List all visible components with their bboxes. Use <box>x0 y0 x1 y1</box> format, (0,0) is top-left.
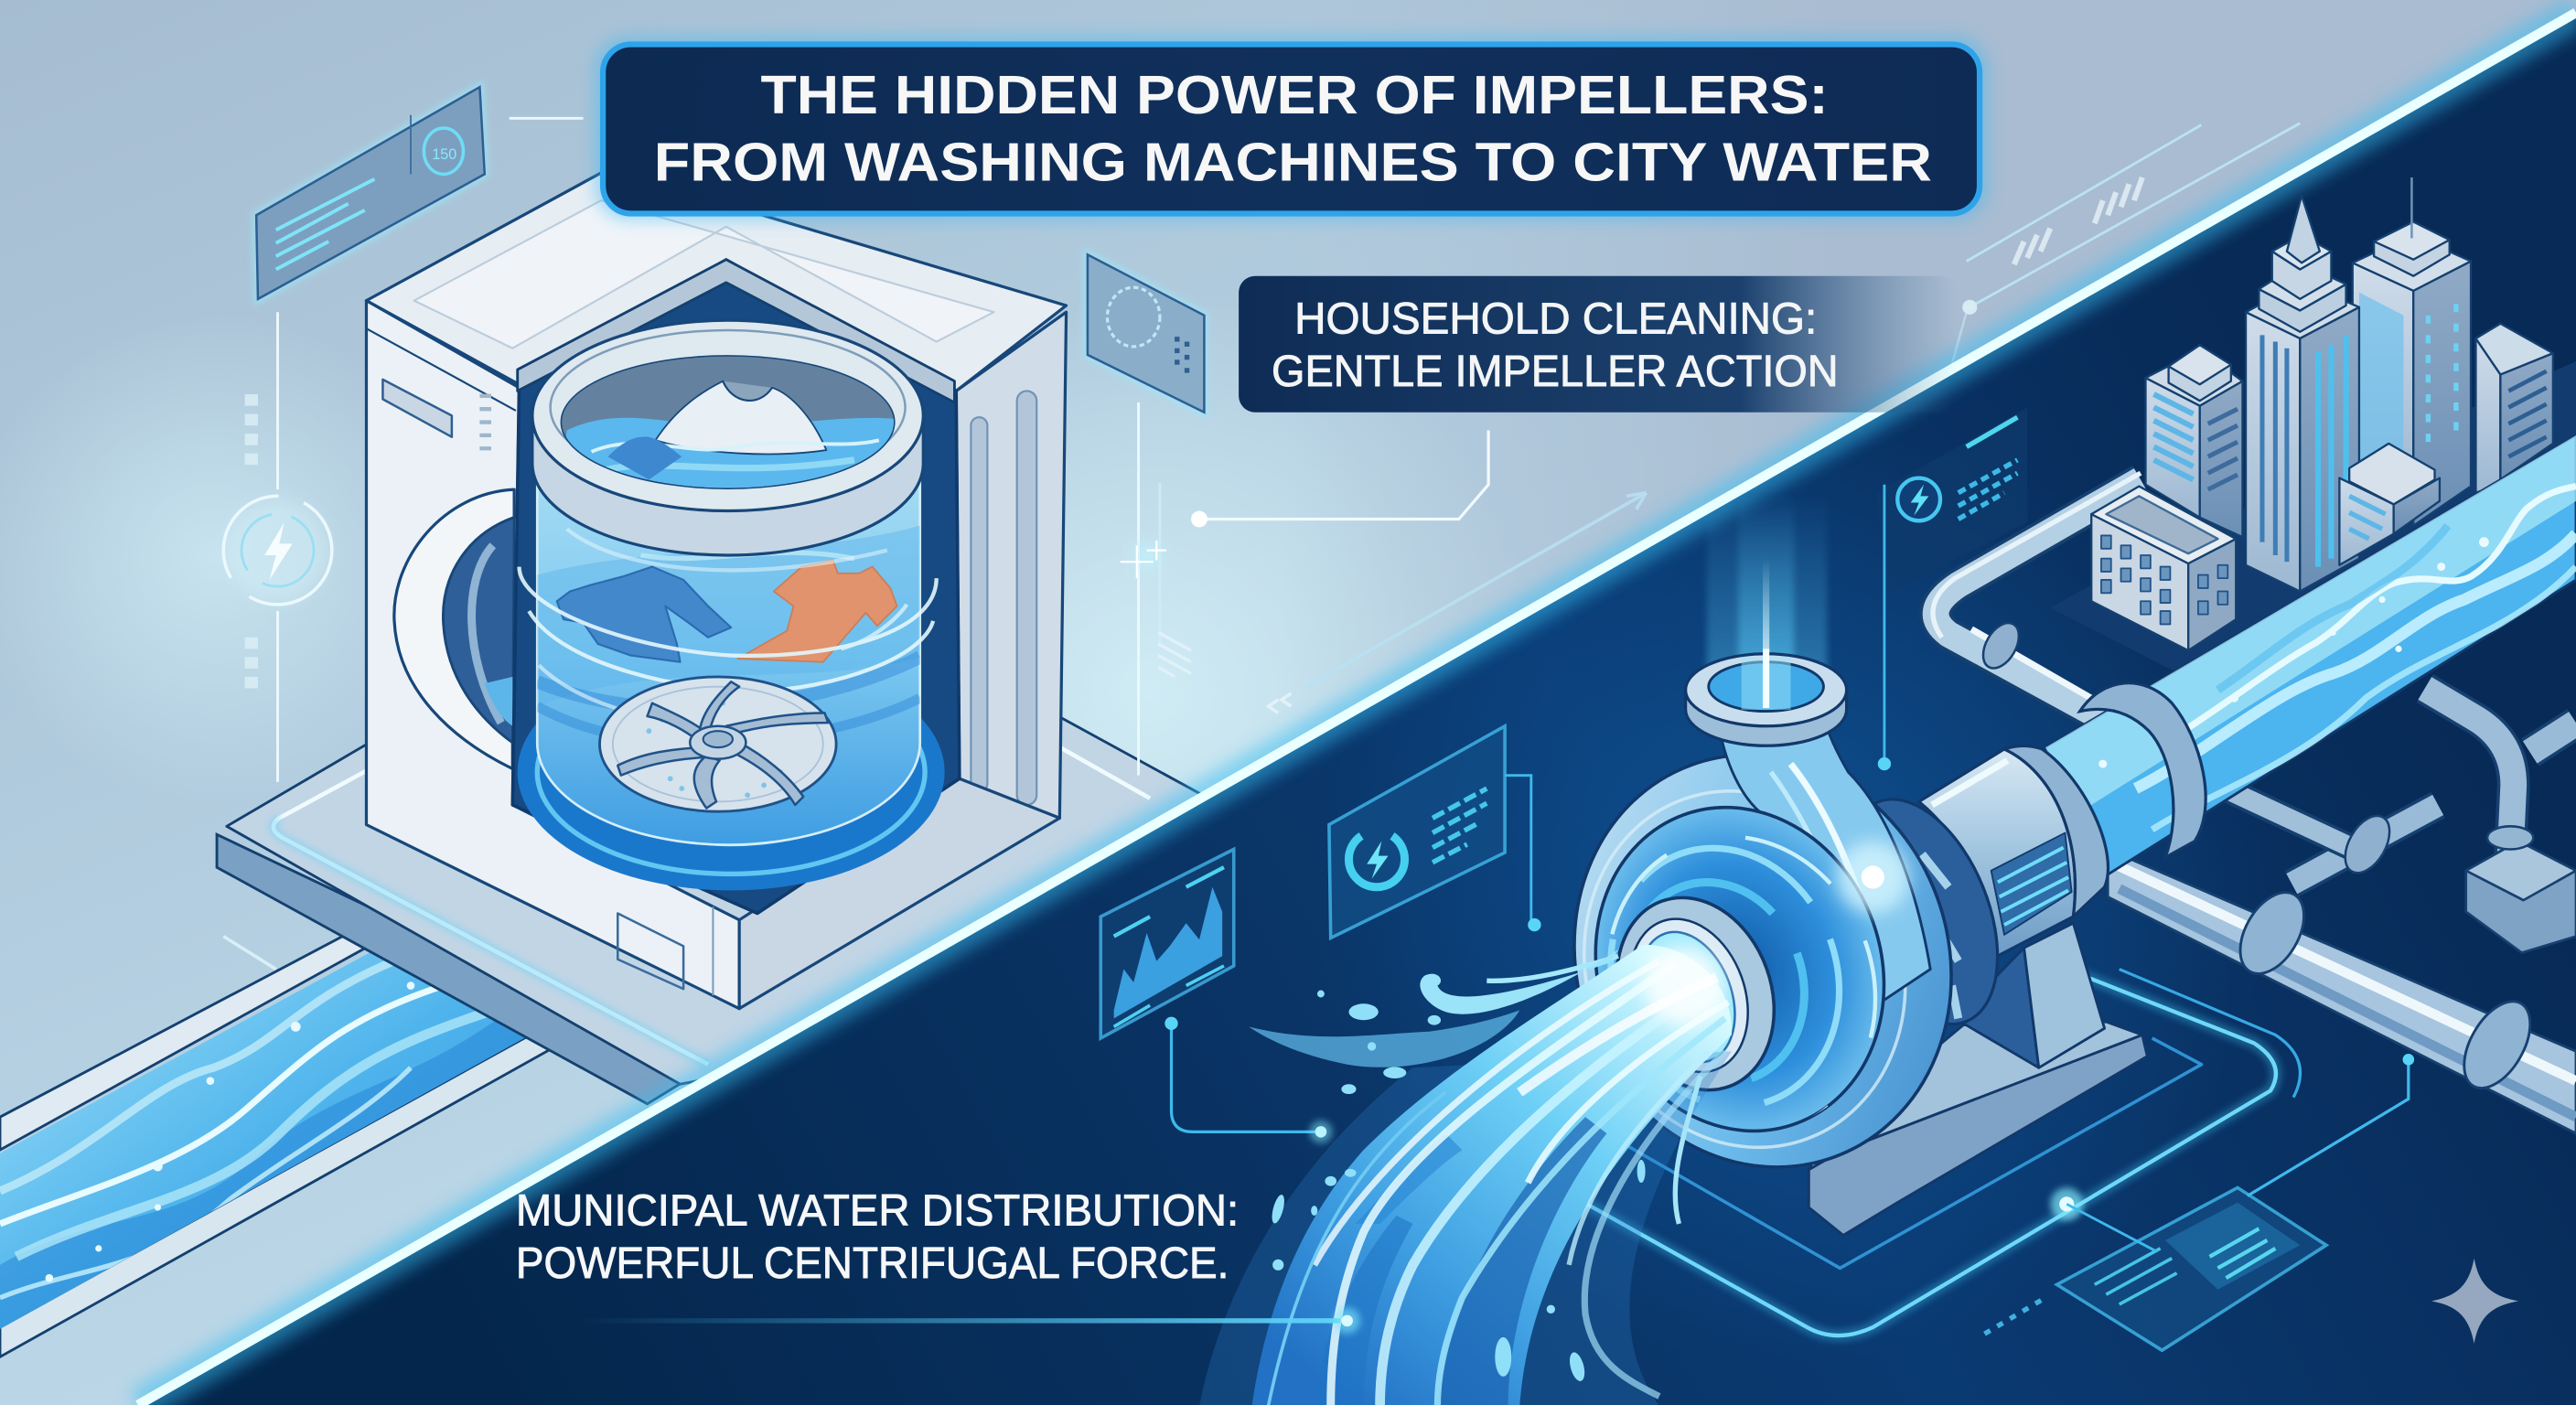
pipe around city left elbow <box>1936 479 2141 723</box>
pump motor <box>1919 745 2108 960</box>
channel of water at bottom left <box>0 928 559 1364</box>
circuit glow lines around pump base <box>1546 970 2300 1335</box>
washer door <box>394 489 514 768</box>
connector: household label <box>1191 431 1488 527</box>
washing machine platform <box>217 718 1203 1104</box>
pump outlet neck <box>1719 716 1930 1002</box>
watermark star <box>2431 1259 2518 1344</box>
gear disc behind casing <box>1817 778 2027 1046</box>
pump outlet flange <box>1591 875 1800 1112</box>
city skyline <box>2091 177 2553 650</box>
UI panel: right of washer <box>1088 254 1204 413</box>
pump inlet flange <box>1686 649 1847 745</box>
glass drum <box>537 468 920 845</box>
platform top <box>227 718 1203 1084</box>
drum rim <box>532 320 923 555</box>
water ribbons in drum <box>537 526 920 744</box>
title text: FROM WASHING MACHINES TO CITY WATER <box>654 132 1932 193</box>
washing machine <box>366 169 1067 1009</box>
UI panel: top-left status <box>256 87 485 299</box>
small front block <box>2339 444 2440 565</box>
household text: GENTLE IMPELLER ACTION <box>1272 347 1839 396</box>
jet core glow <box>1645 946 1723 1025</box>
UI panel: energy gauge <box>1329 726 1541 938</box>
platform glow line <box>274 743 1150 1065</box>
municipal distribution label <box>516 1186 1239 1288</box>
household text: HOUSEHOLD CLEANING: <box>1294 295 1817 344</box>
municipal distribution label: MUNICIPAL WATER DISTRIBUTION: <box>516 1186 1239 1236</box>
pump highlight flare <box>1837 841 1909 913</box>
UI panel: bar chart <box>1100 849 1234 1038</box>
washer left face <box>366 301 739 1009</box>
title text <box>654 64 1932 193</box>
tall tower <box>2353 177 2471 526</box>
pipe flange near city <box>1976 617 2026 674</box>
pump base and support <box>1809 923 2147 1235</box>
pipes behind the pump <box>1933 473 2576 1133</box>
impeller blades <box>617 681 828 809</box>
vertical water beam into pump <box>1707 493 1827 698</box>
water and white shirt in drum top <box>559 353 904 493</box>
underline connector <box>576 1308 1360 1334</box>
jet crescent splash <box>1249 1010 1519 1067</box>
blue clothes <box>557 567 731 662</box>
washer interior cavity <box>512 263 960 913</box>
left decorative chevrons and rays <box>223 123 2301 971</box>
decorative dash stacks <box>245 394 1191 688</box>
jet darker bands <box>1437 1117 1606 1405</box>
jet streaks <box>1268 956 1728 1405</box>
connector: chart to jet <box>1165 1017 1332 1143</box>
pump coupling ring <box>2080 683 2206 857</box>
motor cooling fins <box>1991 833 2072 935</box>
washer right face <box>956 312 1067 818</box>
spire tower <box>2246 196 2359 592</box>
valve box <box>2466 826 2576 953</box>
lower pipe flanges <box>2227 882 2317 984</box>
channel upper rim <box>0 928 374 1150</box>
impeller disk <box>600 677 836 811</box>
main lower steel pipe <box>2108 849 2576 1133</box>
orange shirt <box>737 560 897 662</box>
channel water <box>0 953 525 1329</box>
cavity lip <box>518 260 954 402</box>
sparkle on light side <box>1121 541 1166 578</box>
icon: lightning circle <box>223 496 332 605</box>
tub floor swirl <box>518 654 945 890</box>
channel lower rim <box>0 1028 559 1357</box>
tall tower cap <box>2374 221 2450 276</box>
UI panel: top-left status: 150 <box>432 146 456 163</box>
title text: THE HIDDEN POWER OF IMPELLERS: <box>761 64 1829 125</box>
pump swirling opening <box>1551 767 1928 1172</box>
household cleaning label <box>1239 276 1957 413</box>
UI panel: city energy <box>1876 407 2027 770</box>
title panel <box>595 37 1988 220</box>
platform side edge <box>217 834 706 1104</box>
UI panel: bottom-right <box>1984 1054 2414 1350</box>
icon: top-right tick marks <box>2014 177 2142 264</box>
jet main body <box>1251 945 1732 1405</box>
chart silhouette <box>1114 887 1222 1018</box>
pump volute casing <box>1572 649 2000 1169</box>
swirl strokes around drum <box>520 529 937 729</box>
washer lower front corner <box>739 778 1059 1009</box>
low block with windows <box>2091 487 2236 650</box>
household text <box>1272 295 1839 396</box>
municipal distribution label: POWERFUL CENTRIFUGAL FORCE. <box>516 1239 1229 1288</box>
splash droplets <box>1270 991 1646 1383</box>
jet hook splash <box>1420 949 1618 1014</box>
left tower <box>2145 345 2242 537</box>
washer control panel <box>382 380 491 448</box>
city ground plaque <box>2050 361 2576 677</box>
washer small service hatch <box>617 913 683 989</box>
water jet from pump <box>1199 945 1732 1405</box>
small branch pipe <box>2292 805 2438 884</box>
decorative vertical connectors <box>278 118 1160 782</box>
jet faded outer envelope <box>1199 1051 1732 1405</box>
washer top face <box>366 169 1067 391</box>
water-filled main pipe <box>2045 435 2576 875</box>
right elbow pipe <box>2425 688 2514 854</box>
tower far right <box>2475 324 2553 493</box>
